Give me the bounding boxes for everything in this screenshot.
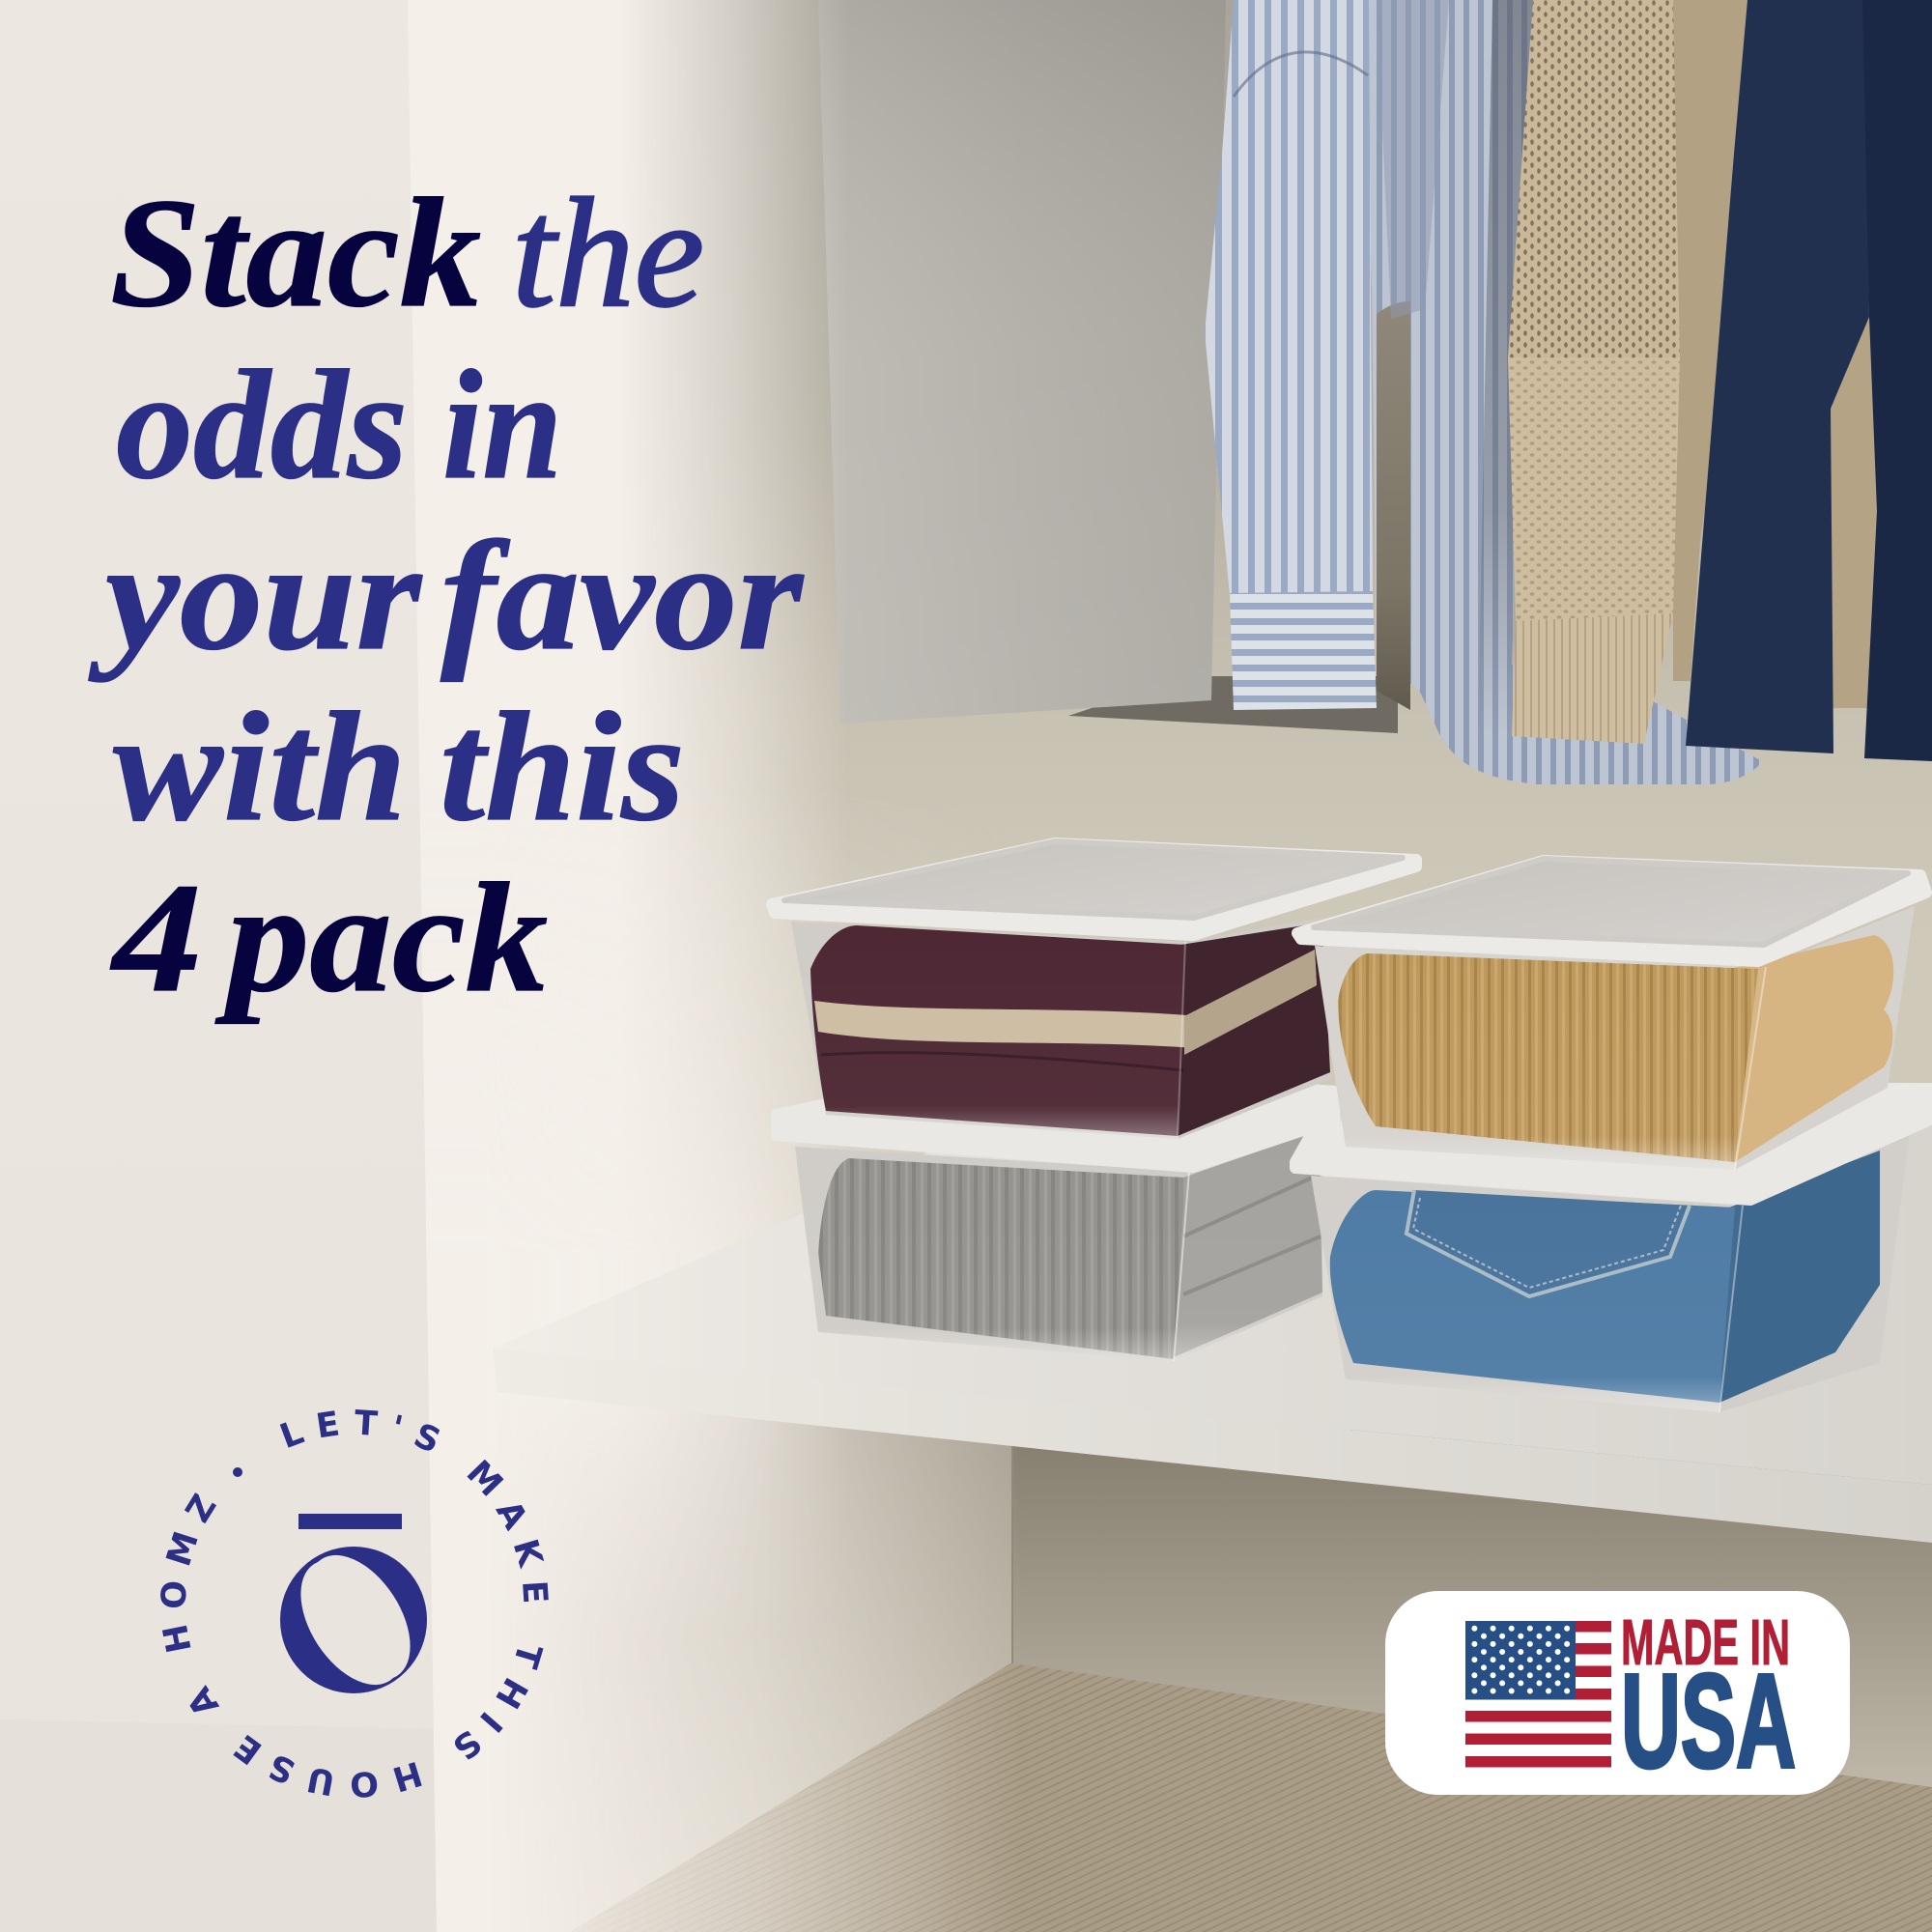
ring text: LET'S MAKE THIS HOUSE A HOMZ <box>160 1409 549 1798</box>
logo letter o <box>280 1547 427 1693</box>
storage box bottom left: grey knit <box>776 1065 1335 1361</box>
ring dot <box>233 1467 242 1477</box>
headline: favor <box>440 510 805 683</box>
back beige sweater <box>1673 0 1748 681</box>
lid <box>1297 859 1926 961</box>
headline: odds <box>116 339 408 512</box>
headline: pack <box>214 852 548 1025</box>
grey t-shirt <box>818 0 1226 724</box>
headline: your <box>88 510 423 683</box>
headline: this <box>440 681 685 854</box>
headline <box>88 167 805 1025</box>
back pocket <box>1406 1190 1690 1296</box>
logo macron bar <box>298 1514 402 1529</box>
striped shirt sleeve <box>1205 0 1377 710</box>
left fade overlay lower <box>429 985 991 1932</box>
beige knit sweater sleeve <box>1508 0 1680 744</box>
headline: Stack <box>110 167 481 340</box>
made in usa badge <box>1385 1591 1850 1796</box>
headline: 4 <box>110 852 202 1025</box>
flag <box>1465 1621 1611 1768</box>
made in text: MADE IN <box>1621 1606 1790 1679</box>
lid <box>772 841 1416 935</box>
headline: the <box>512 167 704 340</box>
striped shirt body <box>1362 0 1762 784</box>
usa text: USA <box>1621 1647 1796 1796</box>
hanging clothes <box>818 0 1932 784</box>
circular brand logo <box>160 1409 549 1798</box>
left fade overlay upper <box>408 0 825 1512</box>
beige sweater peeking right <box>1816 290 1879 708</box>
left wall panel <box>0 0 437 1932</box>
wall shelf <box>493 1111 1932 1543</box>
headline: in <box>442 339 562 512</box>
storage box top right: mustard knit <box>1297 859 1926 1170</box>
sleeve gap <box>1377 301 1410 710</box>
storage box top left: maroon sweater <box>772 841 1416 1139</box>
headline: with <box>113 681 407 854</box>
navy jacket left panel <box>1686 0 1869 753</box>
navy jacket right panel <box>1860 0 1932 761</box>
shadow under grey tee <box>1068 676 1398 733</box>
carpet floor <box>570 1663 1932 1932</box>
storage box bottom right: denim jeans <box>1295 1088 1932 1412</box>
